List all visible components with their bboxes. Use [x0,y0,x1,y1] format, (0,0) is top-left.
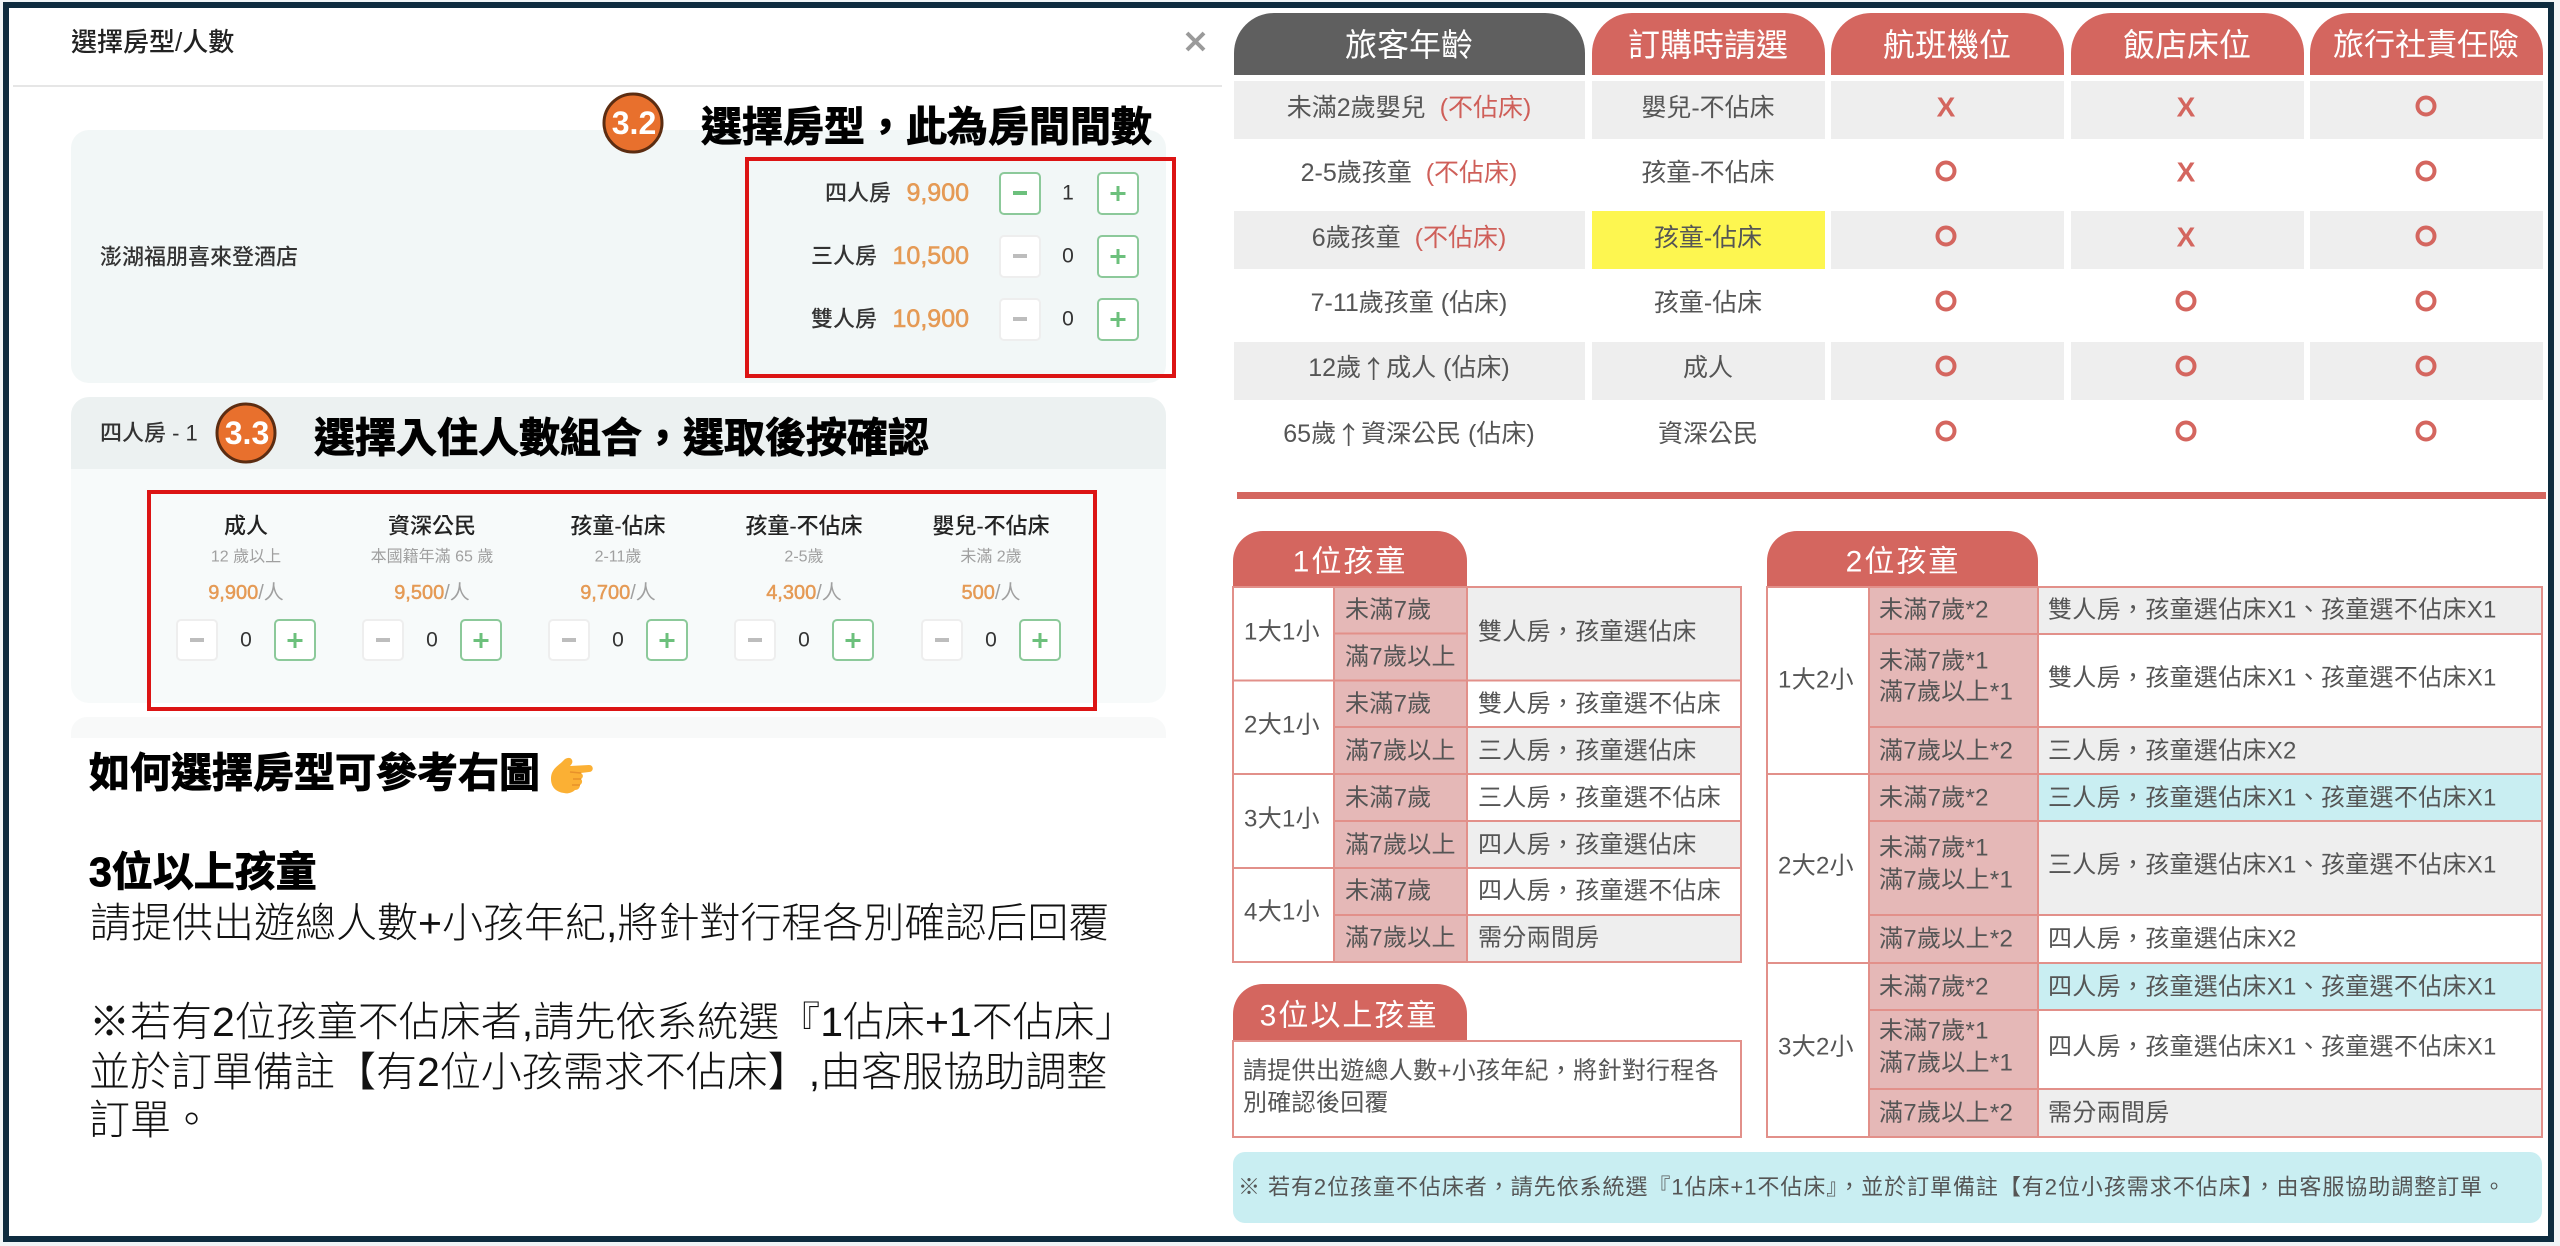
row: child 6: 孩童-佔床 [1654,224,1762,252]
group: 1 adult 2 children: 三人房，孩童選佔床X2 [2048,738,2297,764]
group: 1 adult 2 children: 1大2小 [1778,666,1854,694]
column: infant no bed: 未滿 2歲 [960,548,1022,566]
tab: one child: 1位孩童 [1293,546,1407,578]
text: three or more: 別確認後回覆 [1243,1090,1389,1116]
column: senior: 本國籍年滿 65 歲 [371,548,493,566]
row: adult: 12歲↑成人 (佔床) [1308,350,1510,386]
row: child 7-11: 7-11歲孩童 (佔床) [1311,289,1507,317]
column: adult: 0 [240,628,252,652]
row: 3 adults 1 child: 三人房，孩童選不佔床 [1478,784,1721,812]
column: child with bed: 2-11歲 [595,548,641,566]
row: 3 adults 1 child: 3大1小 [1244,806,1320,832]
panel: three or more children [1233,984,1741,1137]
room type: triple: 10,500 [893,242,969,270]
room type: quad: 9,900 [906,179,969,207]
group: 3 adults 2 children: 滿7歲以上*1 [1879,1050,2013,1076]
row: 4 adults 1 child: 四人房，孩童選不佔床 [1478,878,1721,904]
row: child 6 [1312,222,2434,252]
row: 2 adults 1 child [1244,690,1721,764]
group: 1 adult 2 children [1778,596,2497,764]
column: senior: 0 [426,628,438,652]
row: infant: 嬰兒-不佔床 [1641,94,1775,122]
row: 2 adults 1 child: 雙人房，孩童選不佔床 [1478,690,1721,718]
group: 2 adults 2 children: 四人房，孩童選佔床X2 [2048,926,2297,952]
row: senior: 65歲↑資深公民 (佔床) [1283,416,1535,452]
badge 3.3 [217,404,275,462]
room type: quad: 1 [1062,182,1074,204]
text: three or more: 請提供出遊總人數+小孩年紀，將針對行程各 [1243,1058,1719,1084]
note bar [1233,1152,2542,1223]
panel: hotel room types [71,130,1166,383]
row: 2 adults 1 child: 滿7歲以上 [1345,738,1456,764]
icon: close [1187,33,1204,50]
heading 3.3: 選擇入住人數組合，選取後按確認 [314,415,929,461]
badge 3.2 [604,94,662,152]
notes: text block [89,750,1136,1143]
group: 2 adults 2 children: 2大2小 [1778,852,1854,880]
column: adult: 12 歲以上 [211,548,281,566]
row: 1 adult 1 child [1244,596,1697,670]
tab: three or more [1233,984,1467,1041]
tab: two children: 2位孩童 [1846,546,1960,578]
room type: double: 雙人房 [811,306,877,332]
row: 4 adults 1 child: 需分兩間房 [1478,924,1600,952]
group: 2 adults 2 children: 未滿7歲*1 [1879,834,1989,862]
room type: double: 0 [1062,308,1074,330]
room type: quad [825,173,1138,214]
column: child no bed: 孩童-不佔床 [745,514,863,538]
row: senior [1283,416,2434,452]
group: 3 adults 2 children: 未滿7歲*1 [1879,1018,1989,1044]
row: child 7-11 [1311,289,2434,317]
row: 4 adults 1 child [1244,878,1721,952]
heading 3.2: 選擇房型，此為房間間數 [701,104,1152,150]
column: child with bed: 9,700/人 [580,581,656,604]
row: senior: 資深公民 [1658,420,1758,448]
table header: 旅客年齡 [1345,27,1473,63]
row: 3 adults 1 child [1244,784,1721,858]
row: 1 adult 1 child: 雙人房，孩童選佔床 [1478,618,1697,646]
table header: 旅行社責任險 [2333,28,2519,62]
group: 1 adult 2 children: 滿7歲以上*2 [1879,738,2013,764]
text: three or more [1243,1058,1719,1116]
row: 2 adults 1 child: 未滿7歲 [1345,690,1432,718]
table header: 訂購時請選 [1628,27,1788,63]
column: senior: 9,500/人 [394,581,470,604]
table header: 飯店床位 [2123,27,2251,63]
note bar: ※ 若有2位孩童不佔床者，請先依系統選『1佔床+1不佔床』，並於訂單備註【有2位小孩需求不佔床】，由客服協助調整訂單。 [1238,1174,2506,1200]
group: 1 adult 2 children: 未滿7歲*2 [1879,596,1989,624]
row: infant: 未滿2歲嬰兒 (不佔床) [1287,94,1531,122]
row: child 7-11: 孩童-佔床 [1654,289,1762,317]
group: 2 adults 2 children: 三人房，孩童選佔床X1、孩童選不佔床X1 [2048,852,2497,878]
group: 1 adult 2 children: 雙人房，孩童選佔床X1、孩童選不佔床X1 [2048,664,2497,692]
column: child no bed: 0 [798,628,810,652]
row: infant: X [1937,92,1956,122]
icon: pointing hand [551,758,593,793]
row: 3 adults 1 child: 未滿7歲 [1345,784,1432,812]
row: 4 adults 1 child: 滿7歲以上 [1345,924,1456,952]
group: 3 adults 2 children [1778,974,2497,1126]
tab: two children [1767,531,2038,587]
body: note: 並於訂單備註【有2位小孩需求不佔床】,由客服協助調整 [89,1049,1107,1095]
column: child with bed: 0 [612,628,624,652]
row: child 2-5: 2-5歲孩童 (不佔床) [1301,159,1517,187]
panel: room selection dialog [13,27,1222,738]
tab: one child [1233,531,1467,587]
body: 3+ children: 請提供出遊總人數+小孩年紀,將針對行程各別確認后回覆 [90,900,1109,946]
group: 2 adults 2 children: 滿7歲以上*1 [1879,866,2013,894]
body: note [89,999,1136,1143]
room type: quad: 四人房 [825,180,891,206]
column: child no bed [735,514,873,660]
room type: double [811,299,1138,340]
row: 4 adults 1 child: 未滿7歲 [1345,878,1432,904]
body: note: ※若有2位孩童不佔床者,請先依系統選『1佔床+1不佔床」 [89,999,1136,1045]
column: infant no bed [922,514,1060,660]
row: 2 adults 1 child: 三人房，孩童選佔床 [1478,738,1697,764]
room type: triple: 三人房 [811,244,877,268]
row: 3 adults 1 child: 滿7歲以上 [1345,832,1456,858]
column: infant no bed: 嬰兒-不佔床 [932,514,1050,538]
panel: one child [1233,531,1741,962]
group: 3 adults 2 children: 3大2小 [1778,1034,1854,1060]
body: note: 訂單。 [89,1097,212,1143]
heading: how to choose: 如何選擇房型可參考右圖 [89,750,540,796]
column: child with bed [549,514,687,660]
group: 1 adult 2 children: 雙人房，孩童選佔床X1、孩童選不佔床X1 [2048,596,2497,624]
panel: occupant combination [71,397,1166,703]
row: child 6: 6歲孩童 (不佔床) [1312,224,1506,252]
column: senior [363,514,501,660]
column: adult: 成人 [224,514,268,538]
hotel name: 澎湖福朋喜來登酒店 [100,244,298,270]
row: infant [1287,92,2434,122]
row: adult: 成人 [1683,354,1733,382]
group: 3 adults 2 children: 四人房，孩童選佔床X1、孩童選不佔床X1 [2048,1034,2497,1060]
row: child 2-5 [1301,156,2434,188]
callout box: room type [747,159,1174,376]
room type: triple [811,236,1138,277]
group: 3 adults 2 children: 未滿7歲*2 [1879,974,1989,1000]
group: 1 adult 2 children: 滿7歲以上*1 [1879,678,2013,706]
column: senior: 資深公民 [388,514,476,538]
group: 2 adults 2 children: 滿7歲以上*2 [1879,926,2013,952]
column: adult: 9,900/人 [208,581,284,604]
group: 3 adults 2 children: 需分兩間房 [2048,1100,2170,1126]
next panel stub [71,717,1166,738]
row: 3 adults 1 child: 四人房，孩童選佔床 [1478,832,1697,858]
row: 1 adult 1 child: 未滿7歲 [1345,596,1432,624]
panel: age table [1234,13,2543,452]
room label: 四人房 - 1 [100,420,198,446]
callout box: occupants [149,492,1095,709]
column: child no bed: 4,300/人 [766,581,842,604]
row: infant: X [2177,92,2196,122]
table header: 航班機位 [1883,27,2011,63]
row: child 2-5: 孩童-不佔床 [1641,159,1775,187]
panel: two children [1767,531,2542,1137]
cell fills [1869,587,2542,1137]
row: 1 adult 1 child: 滿7歲以上 [1345,644,1456,670]
group: 2 adults 2 children: 三人房，孩童選佔床X1、孩童選不佔床X1 [2048,784,2497,812]
column: infant no bed: 0 [985,628,997,652]
row: child 2-5: X [2177,156,2196,188]
group: 3 adults 2 children: 滿7歲以上*2 [1879,1100,2013,1126]
column: adult [177,514,315,660]
row: child 6: X [2177,222,2196,252]
tab: three or more: 3位以上孩童 [1260,1000,1438,1032]
group: 2 adults 2 children [1778,784,2497,952]
cell fills [1334,587,1741,962]
column: child with bed: 孩童-佔床 [570,514,666,538]
table header [1234,13,2543,75]
row: 1 adult 1 child: 1大1小 [1244,618,1320,646]
group: 3 adults 2 children: 四人房，孩童選佔床X1、孩童選不佔床X1 [2048,974,2497,1000]
heading: 3+ children: 3位以上孩童 [89,849,317,895]
badge 3.3: 3.3 [225,415,269,451]
room type: triple: 0 [1062,244,1074,268]
column: infant no bed: 500/人 [962,581,1020,604]
badge 3.2: 3.2 [612,105,656,141]
row: 4 adults 1 child: 4大1小 [1244,898,1320,926]
row: adult [1308,350,2434,386]
column: child no bed: 2-5歲 [784,548,824,566]
group: 1 adult 2 children: 未滿7歲*1 [1879,648,1989,674]
group: 2 adults 2 children: 未滿7歲*2 [1879,784,1989,812]
row backgrounds [1234,81,2543,400]
dialog title: 選擇房型/人數 [71,27,234,57]
room type: double: 10,900 [893,305,969,333]
row: 2 adults 1 child: 2大1小 [1244,712,1320,738]
